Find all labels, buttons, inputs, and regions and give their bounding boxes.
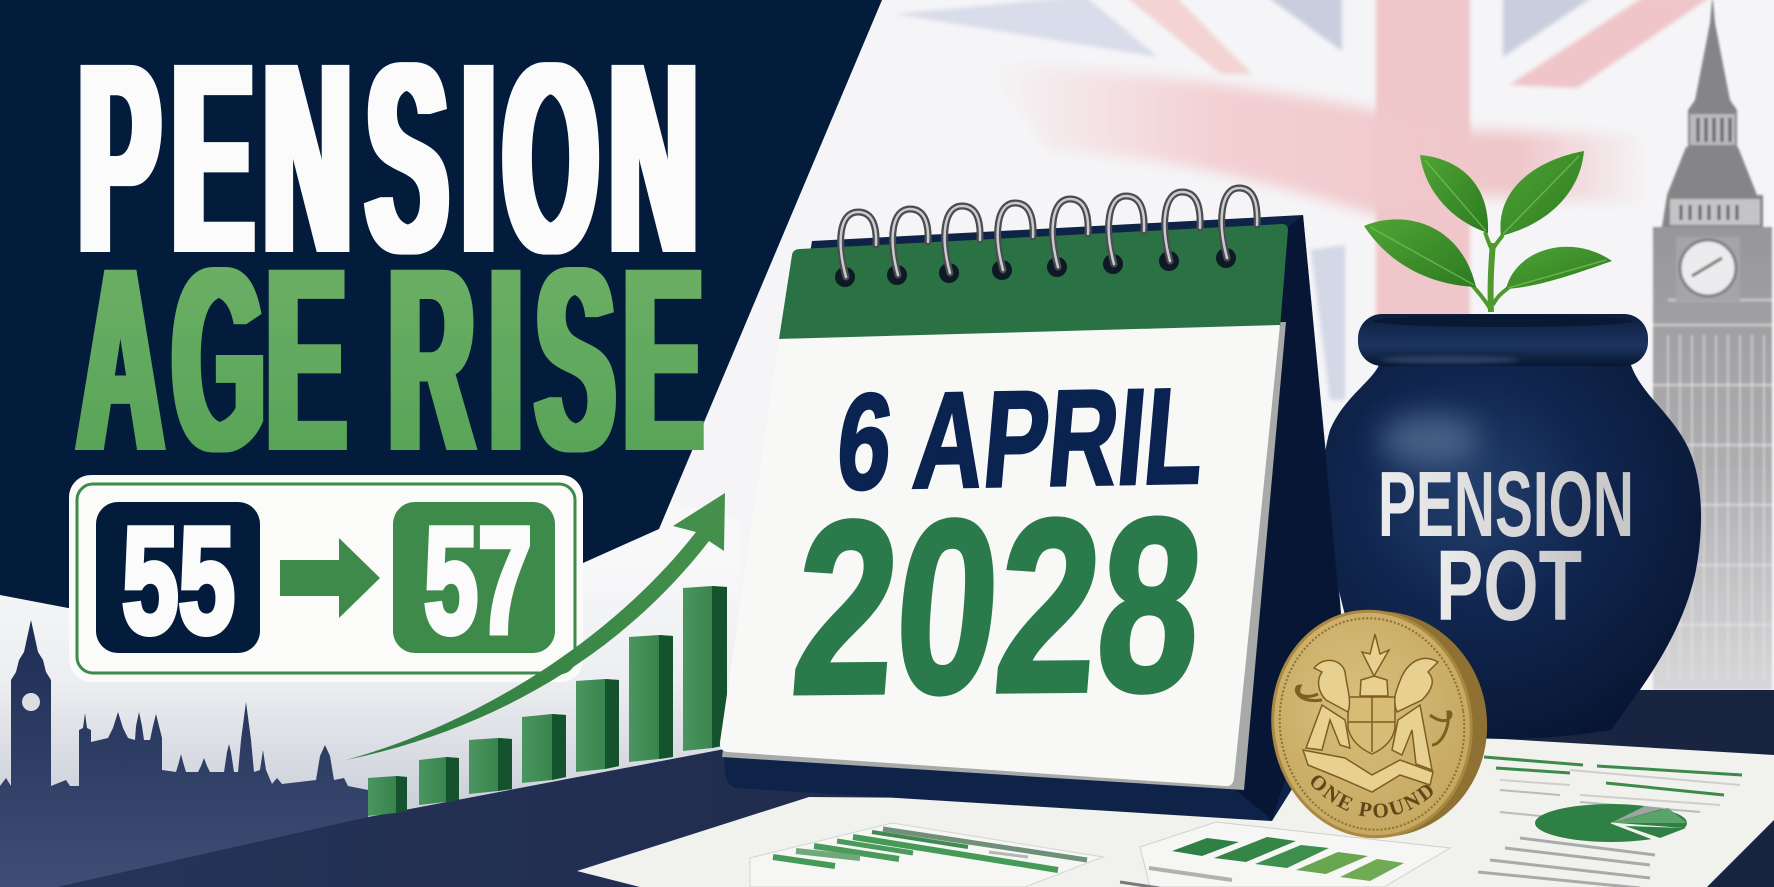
- calendar stand: [724, 215, 1348, 821]
- age badge 57: [393, 496, 555, 664]
- chart: pie: [1535, 804, 1690, 842]
- coin emblem: [1296, 634, 1451, 792]
- panel: lower left light background: [0, 500, 740, 887]
- paper: financial reports: [577, 738, 1774, 887]
- callout: age change 55 to 57: [69, 475, 583, 682]
- bar chart: rising green bars: [368, 586, 727, 816]
- arrow: rising trend: [346, 493, 725, 760]
- pot: navy jar: [1323, 314, 1701, 739]
- panel: navy title background: [0, 0, 882, 608]
- age badge 57: 57: [424, 496, 532, 664]
- coin: one pound: [1271, 610, 1488, 838]
- calendar page: [720, 325, 1280, 786]
- coin inscription: ONE POUND: [1311, 776, 1433, 818]
- leaf: upper left: [1420, 155, 1488, 233]
- calendar: desk calendar: [720, 188, 1348, 821]
- title: pension: PENSION: [78, 6, 698, 310]
- skyline: houses of parliament silhouette: [0, 620, 368, 887]
- calendar date: 6 april: 6 APRIL: [831, 360, 1211, 518]
- leaf: lower left: [1364, 219, 1476, 287]
- calendar header: [779, 224, 1288, 339]
- arrow: 55 to 57: [280, 538, 380, 618]
- background: big ben tower: [1653, 0, 1772, 690]
- calendar page edges: [722, 322, 1286, 790]
- leaf: lower right: [1506, 247, 1612, 289]
- chart: paper bars left: [773, 829, 1087, 870]
- pot label: pot: POT: [1436, 530, 1582, 642]
- leaf: upper right: [1500, 151, 1584, 236]
- pot: plant: [1364, 151, 1612, 312]
- title: age rise: AGE RISE: [78, 214, 702, 507]
- age badge 55: 55: [122, 496, 235, 664]
- calendar rings: [835, 188, 1257, 287]
- calendar date: 2028: 2028: [785, 468, 1211, 746]
- chart: paper bars centre: [1120, 837, 1404, 887]
- table top: [57, 690, 1774, 887]
- chart: paper lines right: [1478, 757, 1742, 887]
